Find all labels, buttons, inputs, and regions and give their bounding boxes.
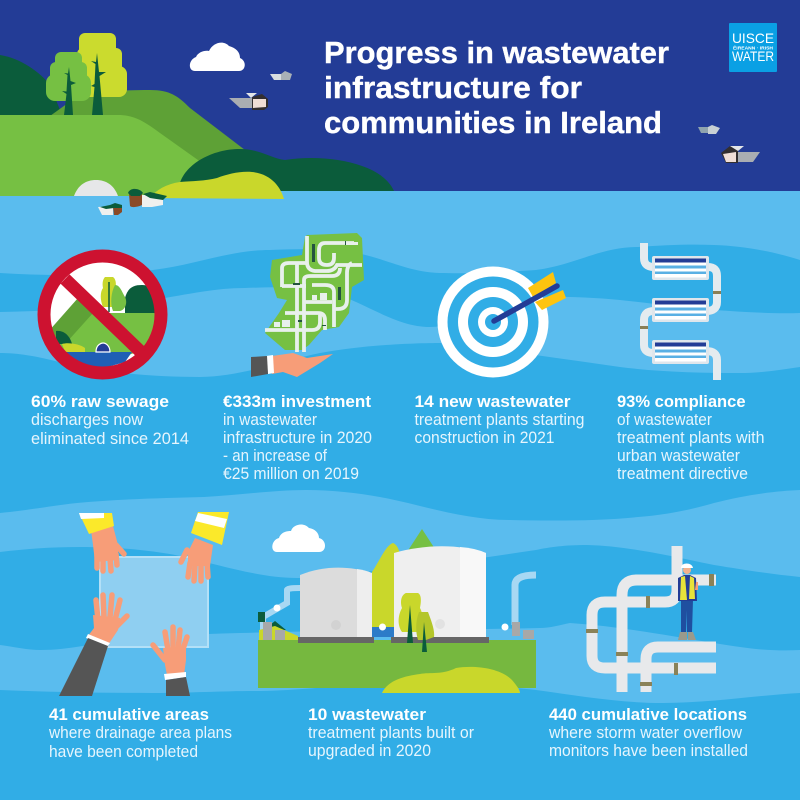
title [324, 35, 669, 140]
text: 41 cumulative areas: 41 cumulative areas [49, 705, 209, 724]
text: 10 wastewater: 10 wastewater [308, 705, 426, 724]
logo [729, 23, 777, 72]
panel: treatment plants built [258, 524, 536, 760]
icon: green tree [46, 52, 91, 101]
text: 10 wastewater: treatment plants built or [308, 723, 474, 742]
text: 14 new wastewater: 14 new wastewater [414, 392, 571, 411]
logo: ÉIREANN · IRISH [733, 44, 773, 50]
text: 93% compliance: urban wastewater [617, 446, 740, 465]
text: 440 cumulative locations [548, 705, 748, 760]
icon: tree trunks [62, 53, 106, 115]
text: 10 wastewater: upgraded in 2020 [308, 741, 431, 760]
header landscape illustration [0, 33, 394, 215]
text: 440 cumulative locations: where storm water overflow [548, 723, 743, 742]
icon: treatment plant [258, 529, 536, 693]
text: 14 new wastewater: treatment plants starting [414, 410, 584, 429]
logo: UISCE [732, 30, 774, 46]
text: 93% compliance [617, 392, 764, 483]
icon: ducks [98, 189, 167, 215]
text: €333m investment: infrastructure in 2020 [223, 428, 372, 447]
text: 60% raw sewage [31, 392, 189, 448]
text: 60% raw sewage: discharges now [31, 410, 144, 429]
icon: no-discharge sign [44, 256, 161, 373]
panel: storm water overflow monitors [548, 546, 748, 760]
icon: hand holding map [251, 353, 333, 377]
text: 14 new wastewater: construction in 2021 [414, 428, 554, 447]
text: 93% compliance: treatment directive [617, 464, 748, 483]
text: €333m investment: in wastewater [223, 410, 317, 429]
sky banner [0, 0, 800, 191]
rock [74, 180, 118, 196]
icon: treatment units and pipes [640, 243, 721, 380]
panel: investment [223, 233, 372, 483]
text: 440 cumulative locations: 440 cumulative locations [549, 705, 747, 724]
text: 93% compliance: of wastewater [617, 410, 712, 429]
title: infrastructure for [324, 70, 582, 105]
text: 14 new wastewater [414, 392, 584, 447]
icon: yellow tree [77, 33, 127, 97]
text: €333m investment: €25 million on 2019 [223, 464, 359, 483]
text: €333m investment [223, 392, 372, 483]
text: 41 cumulative areas: where drainage area plans [48, 723, 232, 742]
icon: pipes [586, 546, 716, 692]
icon: hands holding plan [59, 512, 229, 696]
text: 440 cumulative locations: monitors have been installed [549, 741, 748, 760]
logo: WATER [732, 48, 774, 64]
icon: target with arrow [438, 266, 566, 378]
text: 93% compliance: 93% compliance [617, 392, 746, 411]
text: 41 cumulative areas: have been completed [49, 742, 198, 761]
panel: raw sewage [31, 256, 189, 448]
text: 10 wastewater [308, 705, 474, 760]
title: Progress in wastewater [324, 35, 669, 70]
panel: new plants [414, 266, 584, 447]
text: 60% raw sewage: 60% raw sewage [31, 392, 169, 411]
panel: drainage area plans [48, 512, 232, 761]
icon: cloud [190, 43, 245, 71]
text: 41 cumulative areas [48, 705, 232, 761]
icon: worker [678, 564, 698, 640]
text: 93% compliance: treatment plants with [617, 428, 764, 447]
title: communities in Ireland [324, 105, 662, 140]
icon: Ireland map with pipes [265, 233, 364, 352]
panel: compliance [617, 243, 764, 483]
icon: birds [229, 71, 760, 163]
icon: cloud [272, 524, 325, 552]
text: €333m investment: - an increase of [223, 446, 327, 465]
text: 60% raw sewage: eliminated since 2014 [31, 429, 189, 448]
text: €333m investment: €333m investment [223, 392, 371, 411]
